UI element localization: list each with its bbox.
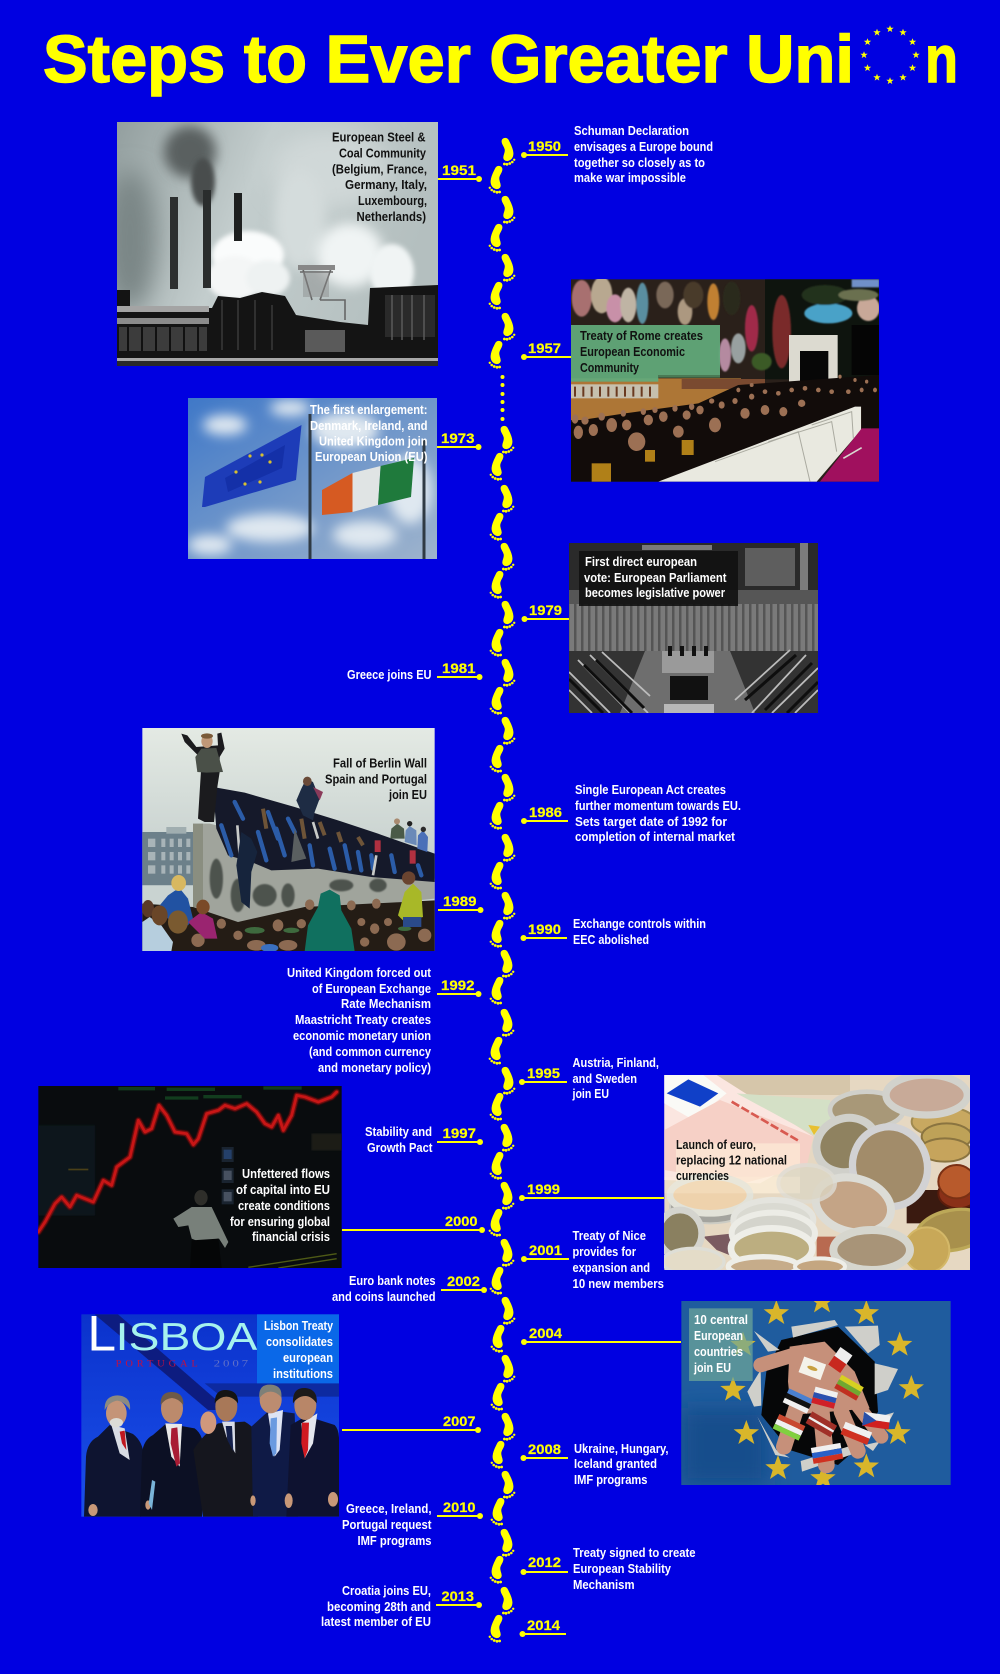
caption: Fall of Berlin Wall: Fall of Berlin Wall <box>333 756 427 771</box>
year marker: 2008: 2008 <box>528 1441 561 1457</box>
text: European Stability Mechanism: European Stability <box>573 1561 672 1576</box>
caption: first enlargement: Denmark, Ireland, and <box>310 418 428 433</box>
caption: first enlargement <box>310 402 428 464</box>
year marker: 1979: 1979 <box>529 602 562 618</box>
caption: European Steel <box>332 130 427 224</box>
year marker: 1995: 1995 <box>527 1065 560 1081</box>
text: Austria, Finland, Sweden <box>572 1055 659 1101</box>
text: Schuman Declaration: make war impossible <box>574 170 686 185</box>
text: Croatia joins EU <box>321 1583 431 1629</box>
year marker: 1999 <box>519 1181 664 1201</box>
caption: Treaty of Rome: Treaty of Rome creates <box>580 328 703 343</box>
text: Exchange controls <box>573 916 706 947</box>
caption: Fall of Berlin Wall <box>325 756 427 802</box>
year marker: 2007: 2007 <box>443 1413 476 1429</box>
photo panel: Lisbon summit <box>81 1305 339 1517</box>
caption: European Steel: Luxembourg, <box>358 193 427 208</box>
caption: Lisbon Treaty: european <box>283 1350 333 1365</box>
caption: 10 central European countries: 10 central <box>694 1312 748 1327</box>
year marker: 2007 <box>342 1413 481 1433</box>
text: Croatia joins EU: becoming 28th and <box>327 1599 431 1614</box>
year marker: 1981 <box>437 660 482 680</box>
text: Austria, Finland, Sweden: and Sweden <box>572 1071 637 1086</box>
photo panel: European Parliament <box>569 543 818 713</box>
text: European Stability Mechanism: Mechanism <box>573 1577 634 1592</box>
text: Single European Act: completion of internal market <box>575 829 736 844</box>
text: Euro bank notes: Euro bank notes <box>349 1273 436 1288</box>
text: Greece, Ireland, Portugal <box>342 1501 432 1548</box>
text: Ukraine, Hungary, Iceland: Ukraine, Hungary, <box>574 1441 668 1456</box>
year marker: 2004: 2004 <box>529 1325 562 1341</box>
caption: unfettered flows: financial crisis <box>252 1229 330 1244</box>
caption: European Steel: Coal Community <box>339 146 427 160</box>
caption: 10 central European countries: join EU <box>693 1360 731 1375</box>
year marker: 2002: 2002 <box>447 1273 480 1289</box>
photo panel: financial chart <box>38 1086 342 1268</box>
year marker: 1951 <box>438 162 482 182</box>
photo panel: Lisbon summit: ISBOA <box>116 1315 258 1359</box>
caption: unfettered flows: for ensuring global <box>230 1214 330 1229</box>
year marker: 1997: 1997 <box>442 1125 476 1141</box>
caption: European Steel: (Belgium, France, <box>332 162 427 176</box>
caption: first direct vote: First direct european <box>585 554 697 569</box>
text: Single European Act: Single European Act creates <box>575 782 726 797</box>
title: n <box>925 22 958 97</box>
text: Single European Act: further momentum towards EU. <box>575 798 741 813</box>
text: Croatia joins EU: Croatia joins EU, <box>342 1583 431 1598</box>
text: Schuman Declaration: together so closely as to <box>574 155 705 170</box>
photo panel: euro coins <box>664 1075 970 1270</box>
text: Treaty of Nice: 10 new members <box>572 1276 664 1291</box>
text: Euro bank notes <box>332 1273 436 1304</box>
text: United Kingdom and Maastricht: Rate Mechanism <box>341 996 431 1011</box>
year marker: 2000: 2000 <box>445 1213 478 1229</box>
text: Greece, Ireland, Portugal: Greece, Ireland, <box>346 1501 432 1516</box>
text: Schuman Declaration: envisages a Europe bound <box>574 139 713 154</box>
caption: European Steel: Netherlands) <box>356 209 426 224</box>
caption: Fall of Berlin Wall: join EU <box>388 787 427 802</box>
caption: first enlargement: The first enlargement: <box>310 402 428 417</box>
year marker: 2012 <box>520 1554 568 1575</box>
caption: first enlargement: United Kingdom join <box>319 434 428 448</box>
text: Schuman Declaration: Schuman Declaration <box>574 123 689 138</box>
year marker: 1989: 1989 <box>443 893 477 909</box>
year marker: 1957: 1957 <box>528 340 561 356</box>
text: United Kingdom and Maastricht: economic monetary union <box>293 1028 431 1043</box>
footprints trail <box>489 139 515 1643</box>
year marker: 1981: 1981 <box>442 660 476 676</box>
year marker: 1951: 1951 <box>442 162 476 178</box>
photo panel: Lisbon summit: 2007 <box>214 1359 251 1369</box>
caption: Lisbon Treaty: institutions <box>273 1366 333 1381</box>
year marker: 2004 <box>521 1325 681 1345</box>
photo panel: Lisbon summit: L <box>87 1305 116 1361</box>
photo panel: hand with flags <box>681 1288 951 1489</box>
photo panel: Lisbon summit: PORTUGAL <box>116 1359 202 1369</box>
photo panel: flags <box>188 398 437 559</box>
caption: first enlargement: European Union (EU) <box>315 449 428 464</box>
text: European Stability Mechanism: Treaty signed to create <box>573 1545 696 1560</box>
icon: ring of twelve stars as the letter o <box>860 25 920 84</box>
caption: unfettered flows <box>230 1166 330 1244</box>
text: United Kingdom and Maastricht: of European Exchange <box>312 981 431 996</box>
text: Exchange controls: Exchange controls within <box>573 916 706 931</box>
photo panel: steel works <box>104 122 438 366</box>
year marker: 1992: 1992 <box>441 977 475 993</box>
photo panel: Treaty of Rome <box>571 277 880 482</box>
year marker: 1997 <box>437 1125 483 1145</box>
caption: Lisbon Treaty <box>264 1320 333 1378</box>
text: Greece, Ireland, Portugal: Portugal request <box>342 1517 432 1532</box>
text: Single European Act: Sets target date of 1992 for <box>575 814 727 829</box>
text: Treaty of Nice <box>572 1228 664 1291</box>
text: United Kingdom and Maastricht: United Kingdom forced out <box>287 965 432 980</box>
caption: Lisbon Treaty: Lisbon Treaty <box>264 1318 334 1333</box>
text: Ukraine, Hungary, Iceland <box>574 1441 668 1487</box>
year marker: 2001: 2001 <box>529 1242 562 1258</box>
text: European Stability Mechanism <box>573 1545 696 1592</box>
year marker: 2010 <box>437 1499 483 1519</box>
caption: unfettered flows: of capital into EU <box>236 1182 330 1197</box>
year marker: 1986 <box>521 804 568 824</box>
caption: 10 central European countries <box>693 1312 748 1375</box>
year marker: 1950 <box>521 138 568 158</box>
text: Single European Act <box>575 782 741 844</box>
year marker: 2013: 2013 <box>442 1588 474 1604</box>
text: Austria, Finland, Sweden: Austria, Finland, <box>572 1055 659 1070</box>
text: Greece, Ireland, Portugal: IMF programs <box>358 1533 432 1548</box>
text: Stability and Growth Pact: Growth Pact <box>367 1140 433 1155</box>
caption: launch of euro: currencies <box>676 1168 729 1183</box>
year marker: 1986: 1986 <box>529 804 562 820</box>
caption: 10 central European countries: European <box>694 1328 743 1343</box>
text: Schuman Declaration <box>574 123 713 185</box>
text: Ukraine, Hungary, Iceland: Iceland granted <box>574 1456 657 1471</box>
caption: launch of euro: replacing 12 national <box>676 1152 787 1168</box>
photo panel: Berlin Wall <box>142 728 435 952</box>
caption: 10 central European countries: countries <box>694 1344 743 1359</box>
caption: Treaty of Rome <box>580 328 703 375</box>
caption: first direct vote <box>584 554 727 600</box>
year marker: 2000 <box>342 1213 485 1233</box>
year marker: 2002 <box>441 1273 487 1293</box>
text: United Kingdom and Maastricht <box>287 965 432 1075</box>
caption: launch of euro: Launch of euro, <box>676 1137 756 1152</box>
year marker: 1950: 1950 <box>528 138 561 154</box>
year marker: 1973 <box>437 430 482 450</box>
year marker: 1990: 1990 <box>528 921 561 937</box>
text: Treaty of Nice: expansion and <box>572 1260 650 1275</box>
caption: Treaty of Rome: Community <box>580 360 640 375</box>
year marker: 1973: 1973 <box>441 430 475 446</box>
year marker: 2010: 2010 <box>443 1499 476 1515</box>
year marker: 2013 <box>436 1588 482 1608</box>
year marker: 1999: 1999 <box>527 1181 560 1197</box>
caption: European Steel: European Steel & <box>332 130 426 144</box>
text: United Kingdom and Maastricht: Maastricht Treaty creates <box>295 1012 431 1027</box>
year marker: 2008 <box>520 1441 568 1461</box>
text: Ukraine, Hungary, Iceland: IMF programs <box>574 1472 648 1487</box>
year marker: 2014 <box>520 1617 566 1637</box>
caption: European Steel: Germany, Italy, <box>345 177 427 192</box>
text: Croatia joins EU: latest member of EU <box>321 1614 431 1629</box>
text: Euro bank notes: and coins launched <box>332 1289 436 1304</box>
year marker: 1957 <box>521 340 571 360</box>
year marker: 1979 <box>522 602 569 622</box>
caption: unfettered flows: create conditions <box>238 1198 330 1213</box>
caption: first direct vote: becomes legislative power <box>585 585 725 600</box>
caption: unfettered flows: Unfettered flows <box>242 1166 330 1181</box>
caption: Treaty of Rome: European Economic <box>580 344 685 359</box>
caption: launch of euro <box>676 1140 786 1180</box>
caption: Lisbon Treaty: consolidates <box>266 1334 333 1349</box>
year marker: 1992 <box>437 977 482 997</box>
text: United Kingdom and Maastricht: (and common currency <box>309 1044 432 1059</box>
caption: first direct vote: vote: European Parliament <box>584 570 727 585</box>
text: Treaty of Nice: Treaty of Nice <box>572 1228 646 1243</box>
year marker: 2012: 2012 <box>528 1554 561 1570</box>
year marker: 1995 <box>519 1065 567 1085</box>
text: Exchange controls: EEC abolished <box>573 932 649 947</box>
text: Austria, Finland, Sweden: join EU <box>572 1086 609 1101</box>
title: Steps to Ever Greater Uni <box>43 22 854 97</box>
caption: Fall of Berlin Wall: Spain and Portugal <box>325 772 427 786</box>
text: Greece joins EU: Greece joins EU <box>347 667 432 682</box>
text: United Kingdom and Maastricht: and monetary policy) <box>318 1060 431 1075</box>
year marker: 1990 <box>520 921 567 941</box>
text: Treaty of Nice: provides for <box>572 1244 636 1259</box>
year marker: 2014: 2014 <box>527 1617 560 1633</box>
year marker: 1989 <box>438 893 484 913</box>
year marker: 2001 <box>521 1242 569 1262</box>
text: Stability and Growth Pact <box>365 1124 433 1155</box>
text: Stability and Growth Pact: Stability and <box>365 1124 432 1139</box>
